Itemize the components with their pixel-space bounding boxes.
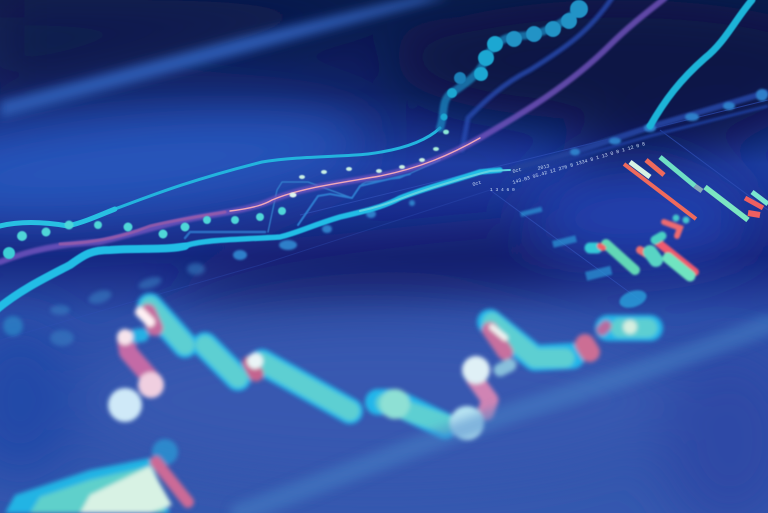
soft candlesticks middle right bbox=[590, 214, 695, 276]
upper right beaded line bbox=[440, 0, 588, 120]
top right cyan line bbox=[650, 0, 752, 126]
top cyan line bbox=[0, 8, 580, 226]
faint blurred axis labels bbox=[520, 207, 649, 311]
axis text bbox=[472, 141, 646, 193]
axis text: 1 3 4 6 0 bbox=[490, 187, 515, 193]
sharp candlesticks upper right bbox=[624, 157, 768, 220]
chart grid rail lines bbox=[0, 100, 768, 340]
blurred left axis labels bbox=[3, 263, 205, 346]
dotted moving average bbox=[3, 130, 449, 259]
highlights bbox=[108, 388, 142, 422]
blurred top-left streak bbox=[0, 0, 450, 118]
lower thick cyan line bbox=[0, 170, 510, 310]
axis text: Oct bbox=[512, 167, 522, 175]
axis markers bbox=[233, 89, 768, 260]
axis text: 143.03 95.42 12 276 8 1334 8 1 13 0 8 1 12 0 8 bbox=[512, 141, 646, 186]
upper axis band bbox=[510, 92, 768, 176]
axis text: 2013 bbox=[537, 163, 550, 172]
axis text: Oct bbox=[472, 180, 482, 188]
halo bbox=[150, 306, 650, 426]
large blurred candlestick line bbox=[108, 306, 650, 440]
faded secondary lines bbox=[185, 0, 612, 238]
blurred bottom left candlestick bbox=[5, 439, 188, 513]
faint bottom axis band bbox=[240, 325, 768, 513]
pink to purple line bbox=[0, 0, 665, 262]
pink segments bbox=[126, 340, 154, 382]
